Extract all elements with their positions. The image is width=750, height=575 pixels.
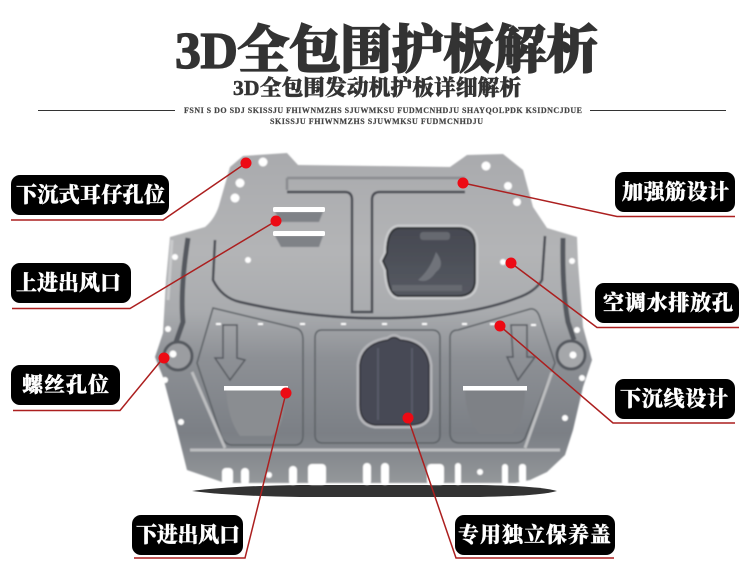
english caption <box>184 106 582 126</box>
callout: 下进出风口 <box>132 388 292 558</box>
vent scoops <box>226 212 525 436</box>
english caption: SKISSJU FHIWNMZHS SJUWMKSU FUDMCNHDJU <box>270 117 483 126</box>
plate body <box>155 153 592 483</box>
white slots <box>224 207 527 390</box>
stamped grooves <box>168 178 574 450</box>
callout: 螺丝孔位: 螺丝孔位 <box>22 373 109 397</box>
lower service cover <box>358 336 431 427</box>
callout: 空调水排放孔: 空调水排放孔 <box>603 291 733 315</box>
callout: 下沉线设计 <box>494 320 735 423</box>
arrow emboss left <box>215 325 245 380</box>
callout: 下沉式耳仔孔位: 下沉式耳仔孔位 <box>16 183 165 207</box>
callout: 螺丝孔位 <box>11 352 170 410</box>
screw boss right <box>557 341 585 369</box>
skid plate <box>155 153 592 485</box>
screw boss left <box>164 342 192 370</box>
callout: 上进出风口 <box>11 216 282 308</box>
upper service cover <box>381 226 477 298</box>
callout: 加强筋设计 <box>458 172 735 216</box>
arrow emboss right <box>507 325 535 380</box>
subtitle: 3D全包围发动机护板详细解析 <box>233 75 521 100</box>
callout: 加强筋设计: 加强筋设计 <box>622 180 729 204</box>
callout: 下沉线设计: 下沉线设计 <box>620 387 728 411</box>
callout: 空调水排放孔 <box>506 258 739 328</box>
english caption: FSNI S DO SDJ SKISSJU FHIWNMZHS SJUWMKSU FUDMCNHDJU SHAYQOLPDK KSIDNCJDUE <box>184 106 582 115</box>
ground shadow <box>192 485 557 497</box>
bottom notches <box>222 463 526 485</box>
callout: 下进出风口: 下进出风口 <box>136 523 240 547</box>
callout: 专用独立保养盖 <box>402 412 615 558</box>
title: 3D全包围护板解析 <box>175 22 598 80</box>
mounting holes <box>162 158 585 478</box>
callout: 上进出风口: 上进出风口 <box>16 271 121 295</box>
callout: 下沉式耳仔孔位 <box>11 158 252 220</box>
callout: 专用独立保养盖: 专用独立保养盖 <box>458 523 611 547</box>
